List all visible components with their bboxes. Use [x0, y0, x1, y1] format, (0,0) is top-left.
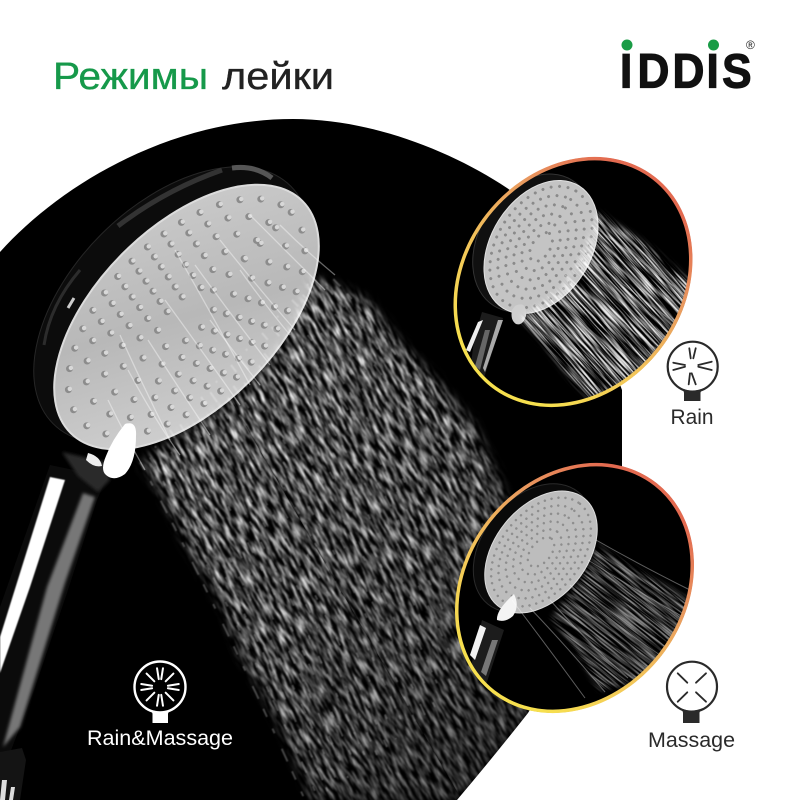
icon and label: Rain&Massage: Rain&Massage	[87, 727, 233, 750]
water streaks over main head	[108, 215, 335, 470]
handle of Rain close-up head	[466, 312, 503, 378]
Rain close-up head	[472, 174, 599, 324]
panel: Massage mode close-up	[455, 462, 694, 714]
icon and label: Massage	[648, 662, 735, 752]
Massage close-up head	[472, 483, 598, 621]
icon and label: Rain	[668, 342, 718, 429]
icon and label: Rain&Massage	[87, 662, 233, 750]
icon and label: Rain: Rain	[670, 406, 714, 429]
main shower head	[0, 115, 366, 497]
panel: Rain mode close-up	[454, 156, 692, 408]
Massage close-up water spray	[516, 540, 688, 698]
logo: IDDIS: IDDIS	[620, 44, 752, 98]
panel: black circular backdrop with main shower head	[0, 115, 622, 800]
icon and label: Massage: Massage	[648, 729, 735, 752]
handle of Massage close-up head	[470, 620, 504, 685]
handle of main shower head	[0, 452, 110, 800]
nozzles on main head	[27, 156, 348, 477]
ring	[407, 112, 739, 452]
title	[53, 56, 334, 98]
title: лейки	[222, 56, 334, 98]
Rain close-up water spray	[520, 210, 688, 398]
ring	[408, 418, 741, 758]
water spray: main	[138, 274, 530, 800]
title: Режимы	[53, 56, 208, 98]
logo: IDDIS: ®	[746, 38, 755, 52]
lever on main head	[86, 423, 136, 478]
